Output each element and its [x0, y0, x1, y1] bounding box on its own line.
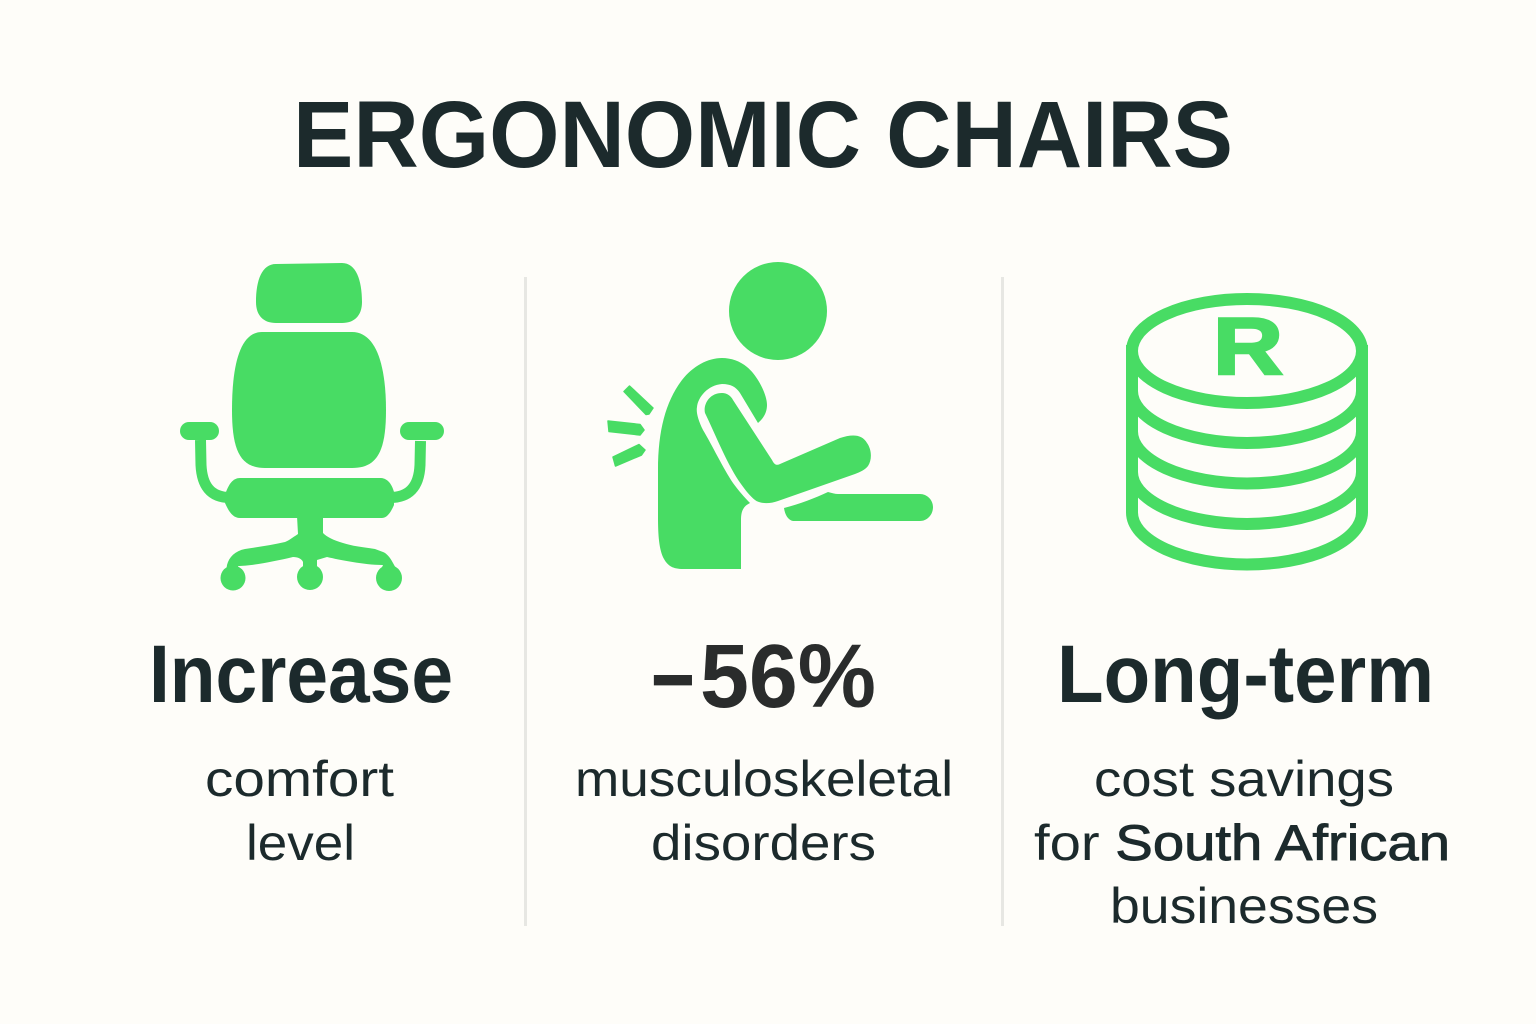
panel: cost savings: [1034, 299, 1450, 934]
text: cost savings for South African businesses: businesses: [1110, 878, 1378, 934]
text: cost savings for South African businesses: cost savings: [1094, 751, 1394, 807]
icon: person with back pain at desk: [608, 262, 933, 569]
text: cost savings for South African businesses: [1034, 751, 1450, 934]
panel: musculoskeletal disorders: [575, 262, 953, 871]
text: cost savings for South African businesses: for South African: [1034, 815, 1450, 871]
text: musculoskeletal disorders: [575, 751, 953, 871]
text: musculoskeletal disorders: disorders: [651, 815, 876, 871]
heading: Long-term: Long-term: [1057, 629, 1434, 720]
heading: -56%: 56%: [700, 627, 876, 727]
text: comfort level: [205, 751, 394, 871]
icon: stack of rand coins: R: [1213, 302, 1283, 392]
icon: ergonomic office chair: [180, 263, 444, 591]
text: comfort level: level: [246, 815, 355, 871]
heading: -56%: -: [648, 623, 698, 722]
icon: stack of rand coins: [1132, 299, 1362, 564]
text: comfort level: comfort: [205, 751, 394, 807]
panel: comfort: [149, 263, 453, 871]
title: ERGONOMIC CHAIRS: [293, 82, 1233, 188]
heading: Increase: Increase: [149, 629, 453, 720]
text: musculoskeletal disorders: musculoskeletal: [575, 751, 953, 807]
